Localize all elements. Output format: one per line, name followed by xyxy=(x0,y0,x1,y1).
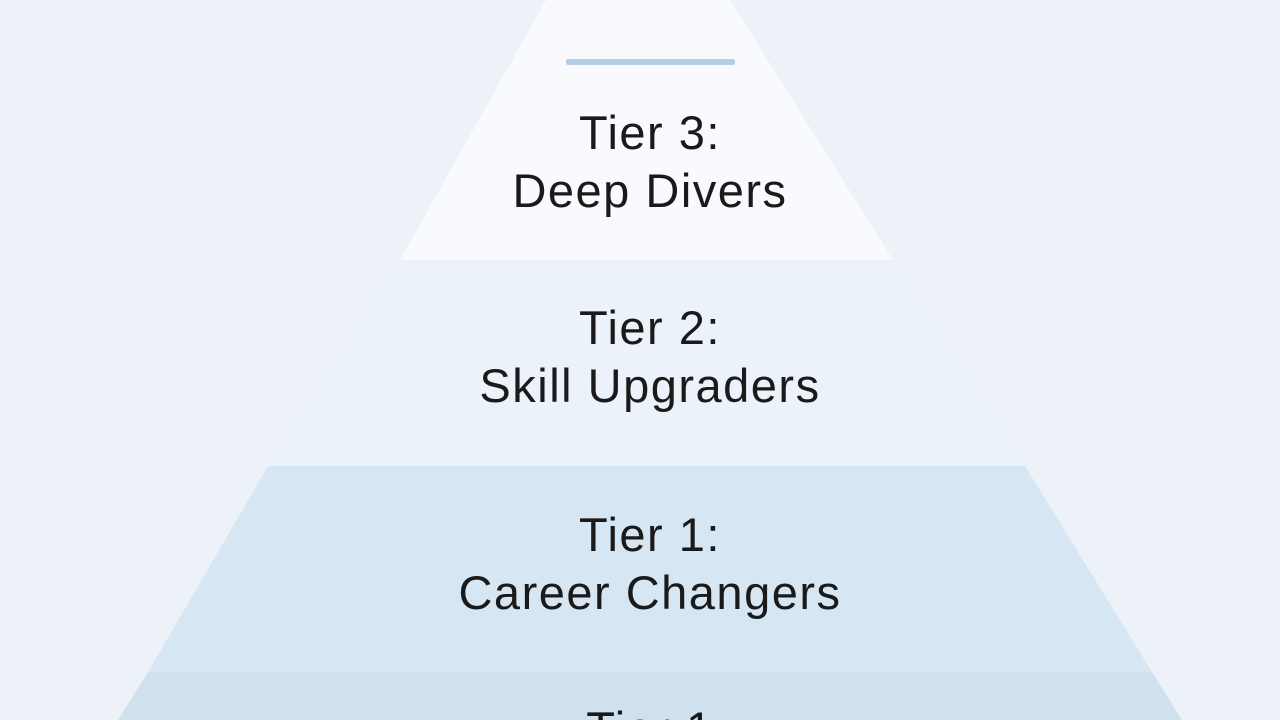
label: tier 2 xyxy=(479,301,821,412)
label: tier 1: Career Changers xyxy=(458,566,842,619)
label: tier 3: Tier 3: xyxy=(579,106,721,159)
label: tier 1 xyxy=(458,508,842,619)
bottom band xyxy=(118,672,1182,720)
tier 1 band xyxy=(148,466,1152,672)
label: tier 2: Tier 2: xyxy=(579,301,721,354)
label: tier 3: Deep Divers xyxy=(512,164,788,217)
tier 2 band xyxy=(268,260,1025,466)
label: tier 1: Tier 1: xyxy=(579,508,721,561)
accent line xyxy=(566,59,735,65)
tier 3 apex xyxy=(400,0,893,260)
label: tier 2: Skill Upgraders xyxy=(479,359,821,412)
label: tier 3 xyxy=(512,106,788,217)
